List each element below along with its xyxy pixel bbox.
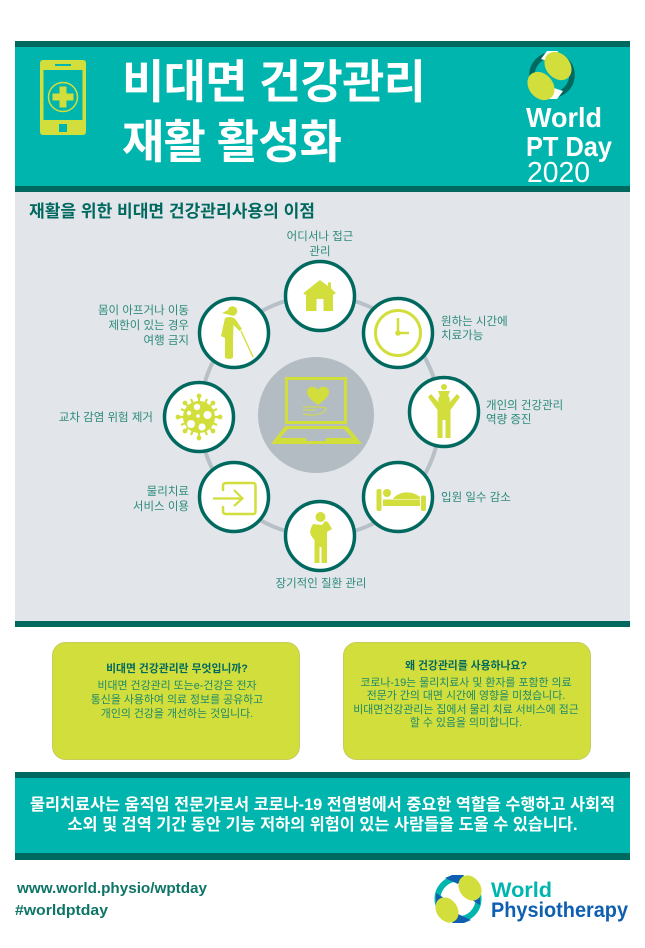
logo: World Physiotherapy [431, 871, 628, 927]
node: no travel [200, 298, 268, 368]
labels: benefit captions: 역량 증진 [486, 413, 532, 426]
card: why use telehealth [344, 642, 590, 760]
card: what is telehealth: 통신을 사용하여 의료 정보를 공유하고 [91, 692, 263, 706]
node: any time [364, 298, 432, 368]
title [122, 56, 426, 168]
panel: benefits [15, 192, 630, 627]
card: why use telehealth: 코로나-19는 물리치료사 및 환자를 포함한 의료 [360, 676, 572, 689]
connecting ring [200, 296, 440, 536]
labels: benefit captions: 여행 금지 [143, 334, 189, 347]
card: why use telehealth: 왜 건강관리를 사용하나요? [405, 658, 527, 672]
central laptop icon [258, 357, 374, 473]
panel heading: 재활을 위한 비대면 건강관리사용의 이점 [29, 202, 315, 221]
node: capacity [410, 378, 478, 446]
labels: benefit captions: 입원 일수 감소 [441, 490, 511, 504]
title: 비대면 건강관리 [122, 56, 426, 108]
labels: benefit captions: 서비스 이용 [133, 500, 189, 513]
labels: benefit captions: 원하는 시간에 [441, 314, 508, 328]
logo: World Physiotherapy: World [491, 879, 552, 902]
card: what is telehealth: 개인의 건강을 개선하는 것입니다. [101, 706, 253, 720]
card: why use telehealth: 전문가 간의 대면 시간에 영향을 미쳤습니다. [367, 689, 565, 702]
node: hospital stay [364, 462, 432, 532]
footer links [15, 880, 208, 919]
labels: benefit captions: 치료가능 [441, 329, 483, 342]
logo: World PT Day 2020: World [526, 102, 602, 133]
card: why use telehealth: 할 수 있음을 의미합니다. [410, 716, 522, 729]
banner: key message: 소외 및 검역 기간 동안 기능 저하의 위험이 있는 사람들을 도울 수 있습니다. [68, 816, 578, 834]
node: chronic conditions [286, 502, 354, 570]
labels: benefit captions: 어디서나 접근 [287, 230, 353, 243]
card: why use telehealth: 비대면건강관리는 집에서 물리 치료 서비스에 접근 [353, 703, 579, 716]
title: 재활 활성화 [122, 116, 342, 168]
labels: benefit captions: 관리 [309, 245, 331, 258]
card: what is telehealth: 비대면 건강관리 또는e-건강은 전자 [97, 679, 257, 692]
card: what is telehealth [52, 642, 300, 760]
node: cross infection [164, 382, 234, 452]
labels: benefit captions [59, 230, 563, 590]
card: what is telehealth: 비대면 건강관리란 무엇입니까? [106, 661, 248, 675]
logo: World Physiotherapy: Physiotherapy [491, 899, 628, 922]
icon: smartphone with medical cross [40, 60, 86, 135]
logo: World PT Day 2020: 2020 [527, 157, 590, 189]
banner: key message: 물리치료사는 움직임 전문가로서 코로나-19 전염병에서 중요한 역할을 수행하고 사회적 [30, 795, 615, 814]
logo: World PT Day 2020 [522, 46, 612, 189]
labels: benefit captions: 물리치료 [147, 485, 189, 498]
labels: benefit captions: 교차 감염 위험 제거 [59, 411, 153, 424]
logo: World PT Day 2020: PT Day [526, 131, 612, 162]
labels: benefit captions: 몸이 아프거나 이동 [98, 304, 189, 317]
header band [15, 41, 630, 192]
labels: benefit captions: 개인의 건강관리 [486, 399, 563, 412]
node: physiotherapy access [200, 462, 268, 532]
footer links: #worldptday [15, 902, 109, 919]
labels: benefit captions: 장기적인 질환 관리 [275, 577, 367, 590]
banner: key message [15, 772, 630, 860]
node: anywhere access [286, 262, 354, 330]
footer links: www.world.physio/wptday [16, 880, 208, 897]
labels: benefit captions: 제한이 있는 경우 [109, 318, 189, 332]
